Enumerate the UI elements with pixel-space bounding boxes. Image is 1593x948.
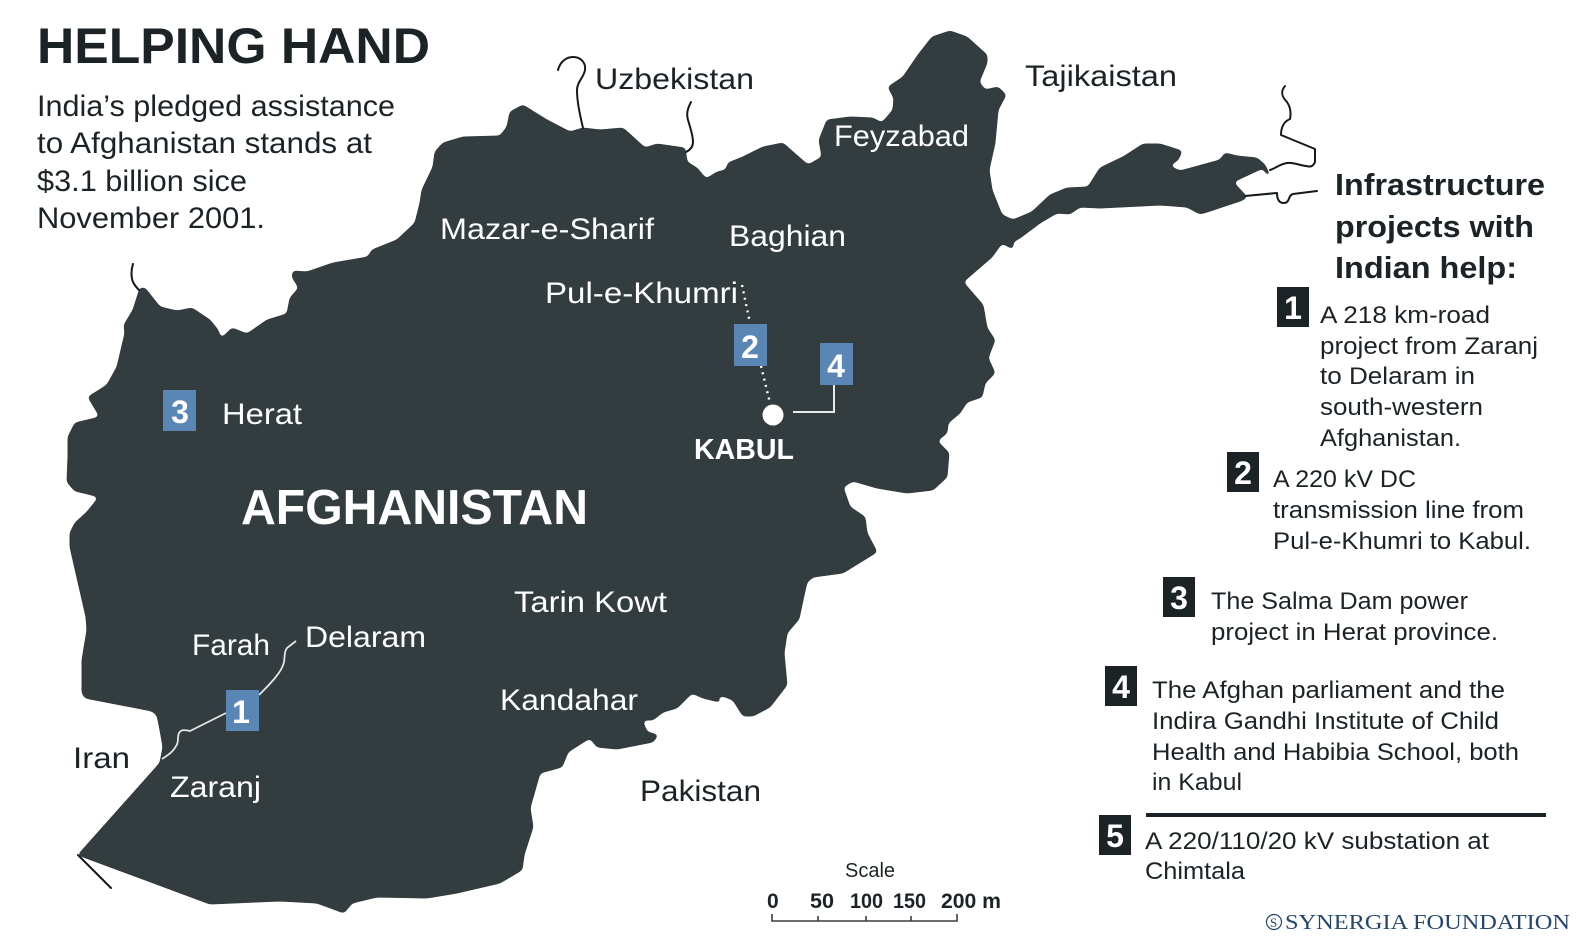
project 4: 4 — [1112, 669, 1130, 705]
neighbouring country labels: Pakistan — [640, 775, 761, 808]
project 4: Health and Habibia School, both — [1152, 739, 1519, 766]
project 1: 1 — [1284, 290, 1302, 326]
city labels: Herat — [222, 398, 303, 431]
scale bar: 200 m — [941, 890, 1001, 913]
transmission line: Pul-e-Khumri to Kabul — [742, 285, 770, 403]
city labels: Zaranj — [170, 771, 261, 804]
country label: Afghanistan: AFGHANISTAN — [241, 481, 588, 535]
city labels: Baghian — [729, 220, 846, 253]
panel heading — [1335, 167, 1545, 285]
map marker 4: 4 — [827, 348, 845, 384]
project 2: 2 — [1234, 455, 1252, 491]
credit: Synergia Foundation: SYNERGIA FOUNDATION — [1285, 910, 1570, 934]
project 4: The Afghan parliament and the — [1152, 677, 1505, 704]
scale bar: 100 — [850, 890, 883, 913]
project 3: The Salma Dam power — [1211, 588, 1468, 615]
project 3 — [1163, 577, 1498, 646]
map marker 4 — [820, 343, 853, 385]
city labels: Feyzabad — [834, 120, 969, 153]
city labels: Pul-e-Khumri — [545, 277, 738, 310]
intro text: India’s pledged assistance — [37, 90, 395, 123]
city labels: Tarin Kowt — [514, 586, 668, 619]
map marker 3: 3 — [171, 394, 189, 430]
border rivers — [78, 57, 1317, 888]
panel heading: Indian help: — [1335, 250, 1517, 285]
map: Afghanistan outline — [67, 31, 1270, 913]
intro text — [37, 90, 395, 235]
project 3: 3 — [1170, 580, 1188, 616]
project 2: A 220 kV DC — [1273, 466, 1416, 493]
city labels: Delaram — [305, 621, 426, 654]
scale bar: 0 — [767, 890, 779, 913]
scale bar: 50 — [810, 890, 834, 913]
neighbouring country labels: Tajikaistan — [1025, 60, 1177, 93]
divider above project 5 — [1146, 813, 1546, 817]
project 1: Afghanistan. — [1320, 425, 1461, 452]
project 5: 5 — [1106, 818, 1124, 854]
project 5: Chimtala — [1145, 858, 1246, 885]
city labels — [170, 120, 969, 804]
project 5: A 220/110/20 kV substation at — [1145, 828, 1489, 855]
project 3: project in Herat province. — [1211, 619, 1498, 646]
scale bar — [767, 860, 1001, 921]
project 4: in Kabul — [1152, 769, 1242, 796]
scale bar: 150 — [893, 890, 926, 913]
map marker 1 — [226, 690, 259, 731]
city labels: Mazar-e-Sharif — [440, 213, 655, 246]
map marker 3 — [163, 390, 196, 431]
panel: infrastructure projects — [1099, 167, 1546, 885]
project 1 — [1277, 287, 1538, 452]
credit: Synergia Foundation: S — [1270, 915, 1277, 930]
project 4 — [1105, 666, 1519, 796]
neighbouring country labels — [73, 60, 1177, 808]
project 4: Indira Gandhi Institute of Child — [1152, 708, 1499, 735]
city labels: Kandahar — [500, 684, 638, 717]
intro text: November 2001. — [37, 202, 265, 235]
project 1: south-western — [1320, 394, 1483, 421]
project 1: project from Zaranj — [1320, 333, 1538, 360]
city labels: Farah — [192, 629, 270, 662]
intro text: to Afghanistan stands at — [37, 127, 373, 160]
project 5 — [1099, 815, 1489, 885]
road: Zaranj to Delaram — [162, 641, 296, 759]
scale bar: Scale — [845, 860, 895, 882]
title: HELPING HAND — [37, 18, 430, 74]
panel heading: Infrastructure — [1335, 167, 1545, 202]
project 1: A 218 km-road — [1320, 302, 1490, 329]
Kabul dot — [762, 404, 784, 426]
intro text: $3.1 billion sice — [37, 165, 247, 198]
panel heading: projects with — [1335, 209, 1534, 244]
project 2: Pul-e-Khumri to Kabul. — [1273, 528, 1531, 555]
city labels: KABUL — [694, 434, 794, 466]
project 1: to Delaram in — [1320, 363, 1475, 390]
map marker 2: 2 — [741, 329, 759, 365]
map marker 2 — [734, 324, 767, 366]
connector: Kabul to marker 4 — [793, 385, 834, 412]
neighbouring country labels: Iran — [73, 742, 130, 775]
map marker 1: 1 — [232, 694, 250, 730]
project 2: transmission line from — [1273, 497, 1524, 524]
project 2 — [1227, 452, 1531, 555]
neighbouring country labels: Uzbekistan — [595, 63, 754, 96]
